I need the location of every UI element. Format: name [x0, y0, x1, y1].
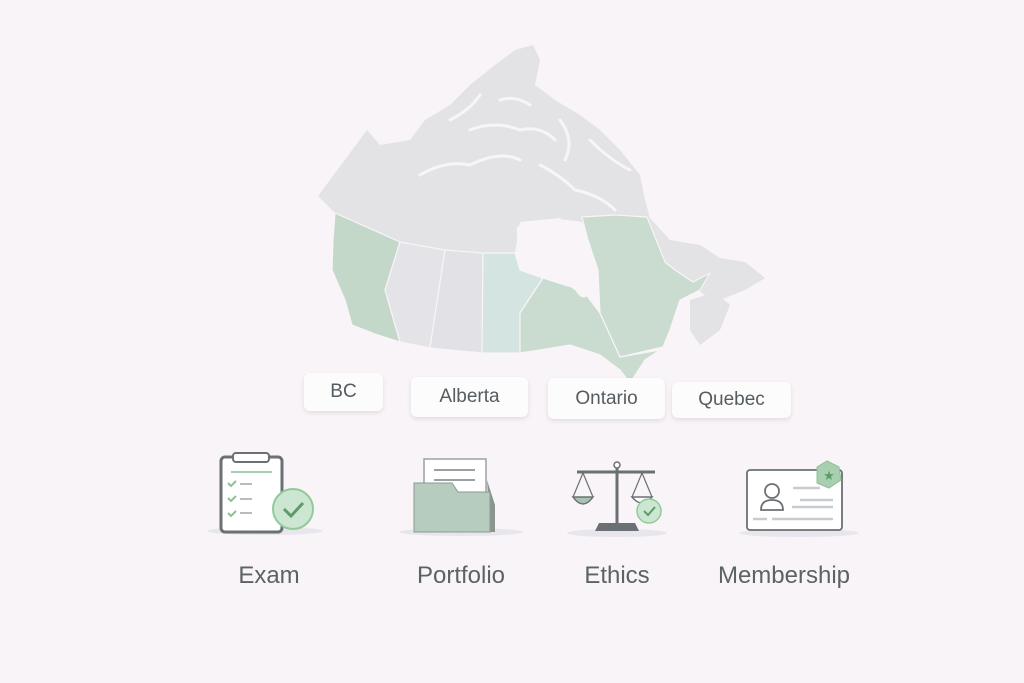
BC [332, 213, 400, 342]
tag: Ontario: Ontario [575, 388, 638, 408]
Manitoba [482, 253, 543, 353]
arctic channels [420, 95, 630, 210]
Hudson Bay [517, 219, 591, 298]
Ontario [520, 278, 660, 383]
Alberta [385, 242, 445, 348]
icon: portfolio folder [399, 458, 523, 536]
icon: exam clipboard [207, 452, 323, 535]
tag: BC: BC [330, 381, 357, 402]
northern territories [318, 45, 765, 345]
tag: Ontario [548, 378, 665, 419]
icon: ethics scales [567, 461, 667, 537]
label: Portfolio: Portfolio [417, 562, 505, 589]
icon: membership card: ★ [823, 468, 835, 483]
icon: membership card [739, 460, 859, 537]
tag: Quebec: Quebec [698, 389, 765, 410]
tag: BC [304, 373, 383, 411]
label: Exam: Exam [238, 562, 300, 589]
tag: Alberta: Alberta [439, 386, 500, 407]
tag: Quebec [672, 382, 791, 418]
label: Ethics: Ethics [584, 562, 650, 589]
label: Membership: Membership [718, 562, 850, 589]
tag: Alberta [411, 377, 528, 417]
Saskatchewan [430, 250, 483, 353]
Quebec [582, 215, 710, 357]
